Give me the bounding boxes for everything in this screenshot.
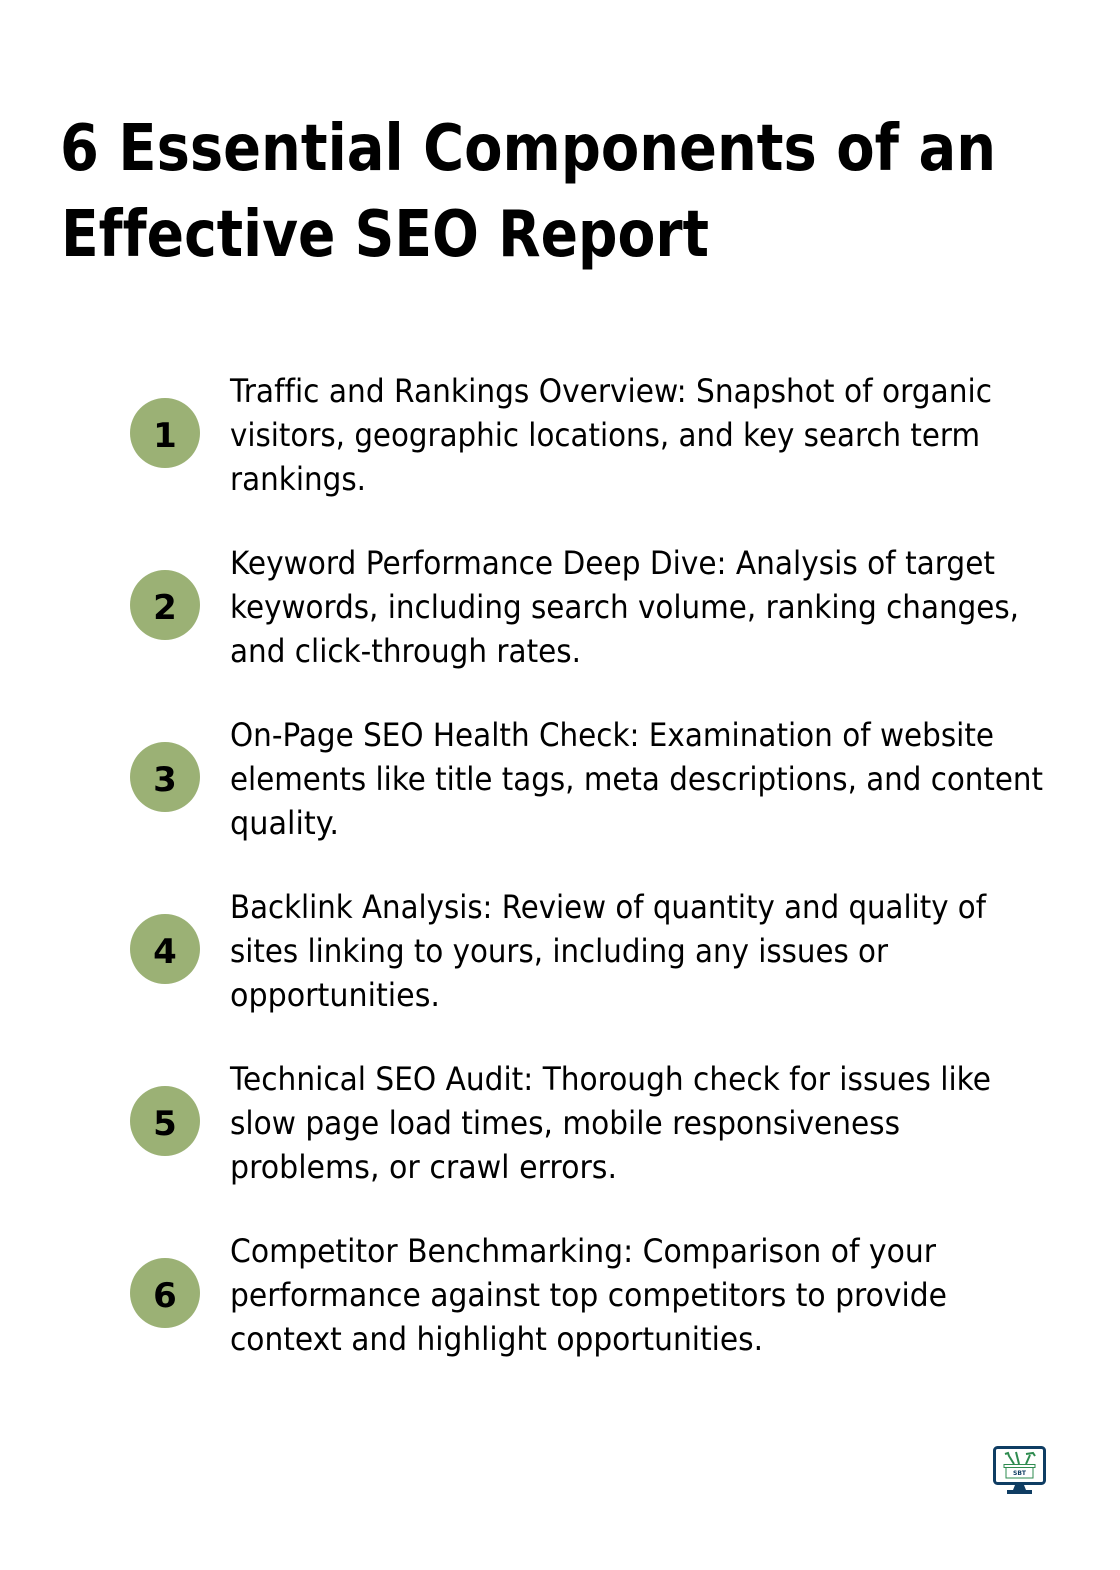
item 5 text: slow page load times, mobile responsiveness bbox=[230, 1104, 900, 1142]
item 4 text: Backlink Analysis: Review of quantity and quality of bbox=[230, 888, 987, 926]
item 2 text: keywords, including search volume, ranking changes, bbox=[230, 588, 1019, 626]
item 1 text: Traffic and Rankings Overview: Snapshot of organic bbox=[229, 372, 992, 410]
title: Effective SEO Report bbox=[61, 198, 709, 272]
title: 6 Essential Components of an bbox=[60, 112, 996, 186]
number badge 3: 3 bbox=[153, 760, 177, 800]
number badge 6 bbox=[130, 1258, 200, 1328]
item 2 text: Keyword Performance Deep Dive: Analysis of target bbox=[230, 544, 995, 582]
number badge 5: 5 bbox=[153, 1104, 177, 1144]
number badge 1: 1 bbox=[153, 416, 177, 456]
item 2: keyword performance bbox=[130, 544, 1019, 670]
item 2 text bbox=[230, 544, 1019, 670]
item 4 text bbox=[230, 888, 987, 1014]
item 5: technical audit bbox=[130, 1060, 991, 1186]
number badge 5 bbox=[130, 1086, 200, 1156]
icon: monitor logo with toolbox: SBT bbox=[1013, 1470, 1027, 1477]
item 4: backlink analysis bbox=[130, 888, 987, 1014]
item 6 text: performance against top competitors to provide bbox=[230, 1276, 947, 1314]
item 5 text bbox=[229, 1060, 991, 1186]
item 6 text bbox=[230, 1232, 947, 1358]
item 3 text: quality. bbox=[230, 804, 339, 842]
number badge 3 bbox=[130, 742, 200, 812]
item 6: competitor benchmarking bbox=[130, 1232, 947, 1358]
item 3 text: elements like title tags, meta descriptions, and content bbox=[230, 760, 1043, 798]
item 4 text: opportunities. bbox=[230, 976, 440, 1014]
item 6 text: Competitor Benchmarking: Comparison of your bbox=[230, 1232, 937, 1270]
title bbox=[60, 112, 996, 272]
number badge 2: 2 bbox=[153, 588, 177, 628]
item 5 text: problems, or crawl errors. bbox=[230, 1148, 617, 1186]
item 1 text bbox=[229, 372, 992, 498]
number badge 4 bbox=[130, 914, 200, 984]
icon: monitor logo with toolbox bbox=[994, 1448, 1044, 1494]
number badge 2 bbox=[130, 570, 200, 640]
number badge 1 bbox=[130, 398, 200, 468]
number badge 6: 6 bbox=[153, 1276, 177, 1316]
item 1: traffic and rankings bbox=[130, 372, 992, 498]
item 1 text: rankings. bbox=[230, 460, 366, 498]
item 3 text: On-Page SEO Health Check: Examination of website bbox=[230, 716, 994, 754]
item 3: on-page SEO bbox=[130, 716, 1043, 842]
item 3 text bbox=[230, 716, 1043, 842]
item 6 text: context and highlight opportunities. bbox=[230, 1320, 763, 1358]
item 4 text: sites linking to yours, including any issues or bbox=[230, 932, 889, 970]
number badge 4: 4 bbox=[153, 932, 177, 972]
item 1 text: visitors, geographic locations, and key search term bbox=[230, 416, 980, 454]
item 2 text: and click-through rates. bbox=[230, 632, 581, 670]
item 5 text: Technical SEO Audit: Thorough check for issues like bbox=[229, 1060, 991, 1098]
